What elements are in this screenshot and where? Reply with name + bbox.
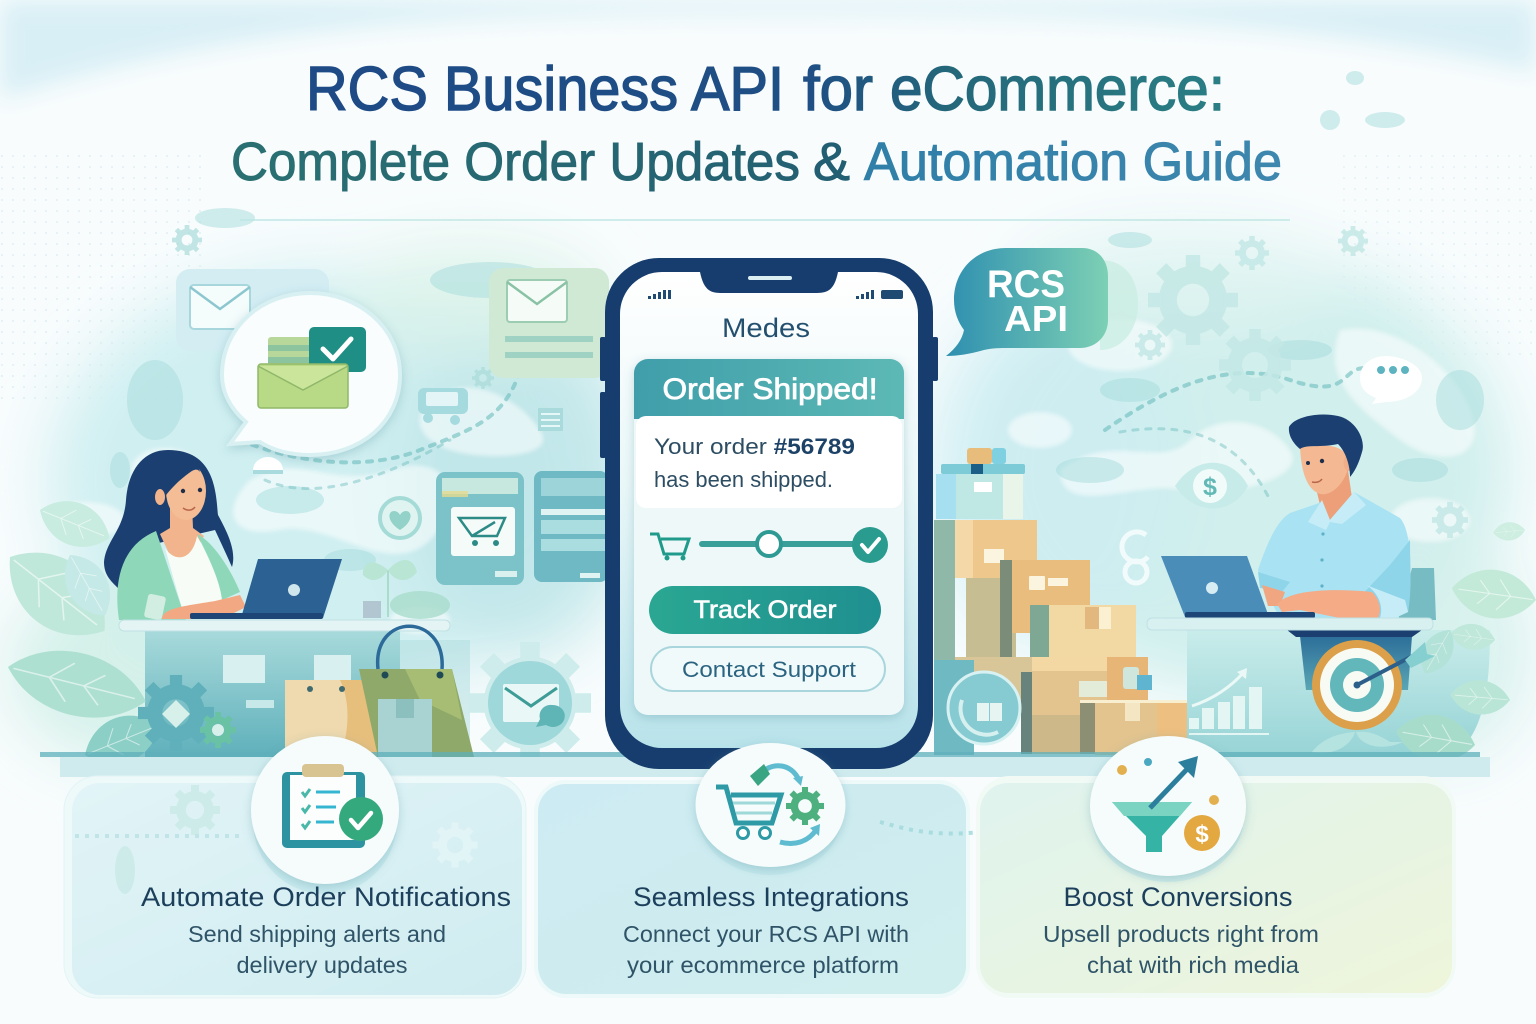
hair bbox=[104, 450, 233, 590]
right arm bbox=[1277, 590, 1380, 618]
card header: Order Shipped! bbox=[662, 373, 878, 406]
truck bbox=[418, 388, 468, 425]
icon: cart and gear bbox=[696, 743, 846, 875]
chat bubble small bbox=[1360, 356, 1422, 404]
cardboard boxes bbox=[934, 448, 1187, 755]
woman with laptop bbox=[104, 450, 342, 621]
gear with envelope bbox=[469, 642, 591, 764]
email card and lines bbox=[489, 268, 609, 378]
tablet with cart bbox=[436, 472, 524, 585]
title line 1: eCommerce: bbox=[890, 55, 1225, 124]
leaves left bbox=[0, 490, 168, 776]
title line 1: for bbox=[803, 55, 873, 124]
panel text bbox=[188, 921, 446, 978]
button: contact support bbox=[651, 647, 885, 691]
plant and cup bbox=[363, 560, 450, 619]
button: contact support: Contact Support bbox=[682, 657, 856, 682]
panel heading: Automate Order Notifications bbox=[141, 882, 511, 912]
soft texture blobs bbox=[45, 319, 1475, 634]
RCS API speech bubble: RCS bbox=[987, 263, 1065, 306]
panel: automate order notifications bbox=[64, 736, 526, 998]
panel heading: Boost Conversions bbox=[1064, 882, 1292, 912]
title line 2: & bbox=[813, 132, 850, 192]
small leaves below target bbox=[1312, 732, 1403, 753]
laptop bbox=[1161, 556, 1269, 617]
desk right bbox=[1147, 618, 1433, 630]
RCS API speech bubble: API bbox=[1004, 298, 1068, 339]
neck bbox=[1316, 470, 1352, 524]
message: has been shipped. bbox=[654, 467, 833, 492]
bottom panels bbox=[64, 736, 1456, 998]
desk base with icons bbox=[145, 630, 470, 757]
leaves right bbox=[1392, 521, 1536, 767]
man with laptop bbox=[1161, 414, 1436, 620]
chest and neck bbox=[160, 505, 204, 560]
arm bbox=[162, 595, 246, 619]
panel text: your ecommerce platform bbox=[627, 952, 899, 978]
order card bbox=[634, 359, 904, 715]
small background gears bbox=[172, 225, 494, 389]
collar bbox=[1308, 492, 1366, 530]
icon: clipboard checklist bbox=[251, 736, 399, 894]
small bubble bbox=[253, 457, 283, 474]
desk bbox=[119, 620, 450, 631]
gear: left bbox=[138, 675, 236, 751]
panel texture bbox=[75, 785, 478, 894]
icon: target bbox=[1312, 640, 1435, 730]
panel: seamless integrations bbox=[534, 743, 1010, 998]
left scene bbox=[0, 225, 609, 776]
right base bbox=[1187, 630, 1490, 757]
cardigan bbox=[117, 531, 186, 620]
chair bbox=[1398, 568, 1436, 620]
panel text bbox=[1043, 921, 1319, 978]
face bbox=[166, 462, 206, 520]
title bbox=[231, 55, 1282, 192]
title line 2 bbox=[231, 132, 1282, 192]
panel heading: Seamless Integrations bbox=[633, 882, 909, 912]
status bar bbox=[648, 290, 903, 299]
panel text: chat with rich media bbox=[1087, 952, 1300, 978]
hair bbox=[1289, 414, 1363, 477]
panel text: Send shipping alerts and bbox=[188, 921, 446, 947]
web page card bbox=[534, 471, 608, 582]
floor band bbox=[40, 752, 1490, 777]
message bbox=[636, 416, 902, 508]
facial features bbox=[1306, 461, 1310, 465]
title line 1: RCS Business API bbox=[306, 55, 784, 124]
laptop bbox=[241, 559, 342, 618]
panel texture bbox=[880, 822, 1010, 834]
dollar icon bbox=[1175, 463, 1248, 508]
panel: boost conversions bbox=[976, 736, 1456, 998]
panel text bbox=[623, 921, 909, 978]
phone body bbox=[605, 258, 933, 769]
button: track order: Track Order bbox=[694, 596, 836, 624]
face bbox=[1300, 446, 1347, 494]
glass box bbox=[936, 448, 1025, 519]
right scene bbox=[934, 226, 1536, 767]
message: Your order #56789 bbox=[654, 434, 855, 459]
progress tracker bbox=[650, 527, 888, 563]
phone screen bbox=[620, 272, 918, 748]
panel text: Upsell products right from bbox=[1043, 921, 1319, 947]
shirt buttons bbox=[1320, 532, 1325, 588]
hair fringe bbox=[158, 456, 200, 500]
facial features bbox=[181, 489, 185, 493]
sender name: Medes bbox=[722, 313, 810, 343]
dollar icon: $ bbox=[1203, 473, 1217, 501]
glass sphere with document bbox=[934, 660, 1020, 755]
left cuff and hand bbox=[1258, 572, 1290, 592]
gears background bbox=[1135, 226, 1468, 538]
icon: mail card back bbox=[176, 269, 329, 351]
panel text: delivery updates bbox=[236, 952, 408, 978]
title line 2: Automation Guide bbox=[864, 132, 1282, 192]
white top bbox=[165, 536, 222, 619]
white circle icons bbox=[1122, 532, 1148, 583]
icon: funnel and coin: $ bbox=[1195, 821, 1209, 848]
note icon bbox=[538, 408, 563, 431]
speech bubble with envelopes bbox=[222, 293, 400, 455]
heart circle bbox=[380, 498, 420, 538]
bar chart bbox=[1189, 668, 1269, 735]
title line 1 bbox=[306, 55, 1225, 124]
shirt bbox=[1258, 492, 1411, 618]
phone bbox=[600, 258, 938, 769]
panel text: Connect your RCS API with bbox=[623, 921, 909, 947]
button: track order bbox=[649, 586, 881, 634]
RCS API speech bubble bbox=[946, 248, 1138, 356]
icon: funnel and coin bbox=[1090, 736, 1246, 882]
card header bbox=[634, 359, 904, 419]
title line 2: Complete Order Updates bbox=[231, 132, 800, 192]
shopping bags bbox=[285, 626, 474, 757]
